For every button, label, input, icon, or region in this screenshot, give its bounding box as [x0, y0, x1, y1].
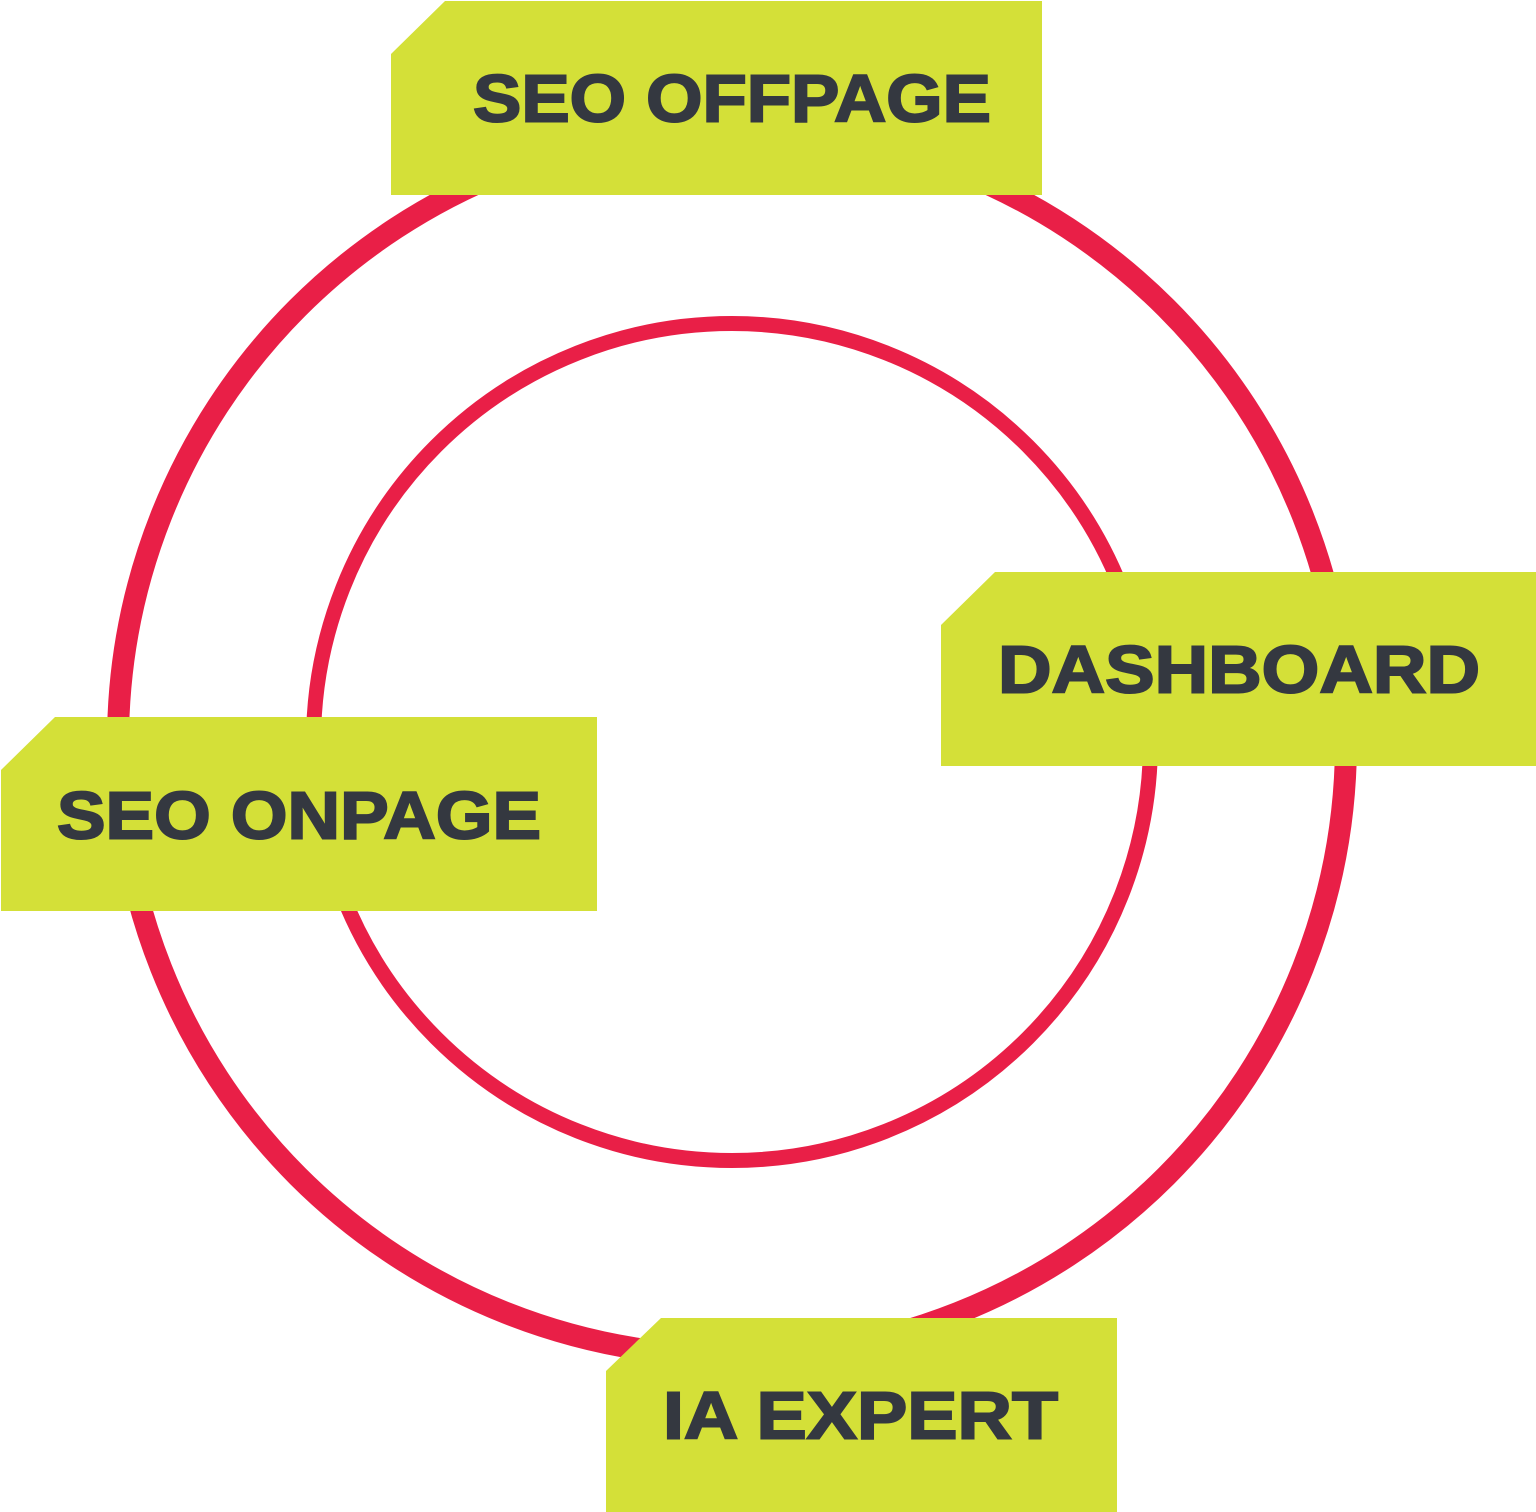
- label: IA EXPERT: [606, 1318, 1117, 1512]
- label: SEO ONPAGE: SEO ONPAGE: [57, 778, 541, 854]
- label: SEO OFFPAGE: [391, 1, 1042, 195]
- outer ring: [118, 128, 1346, 1356]
- label: SEO OFFPAGE: SEO OFFPAGE: [473, 62, 991, 136]
- inner ring: [314, 324, 1150, 1160]
- label: SEO ONPAGE: [1, 717, 597, 911]
- label: IA EXPERT: IA EXPERT: [663, 1378, 1058, 1454]
- label: DASHBOARD: DASHBOARD: [998, 632, 1480, 708]
- label: DASHBOARD: [941, 572, 1536, 766]
